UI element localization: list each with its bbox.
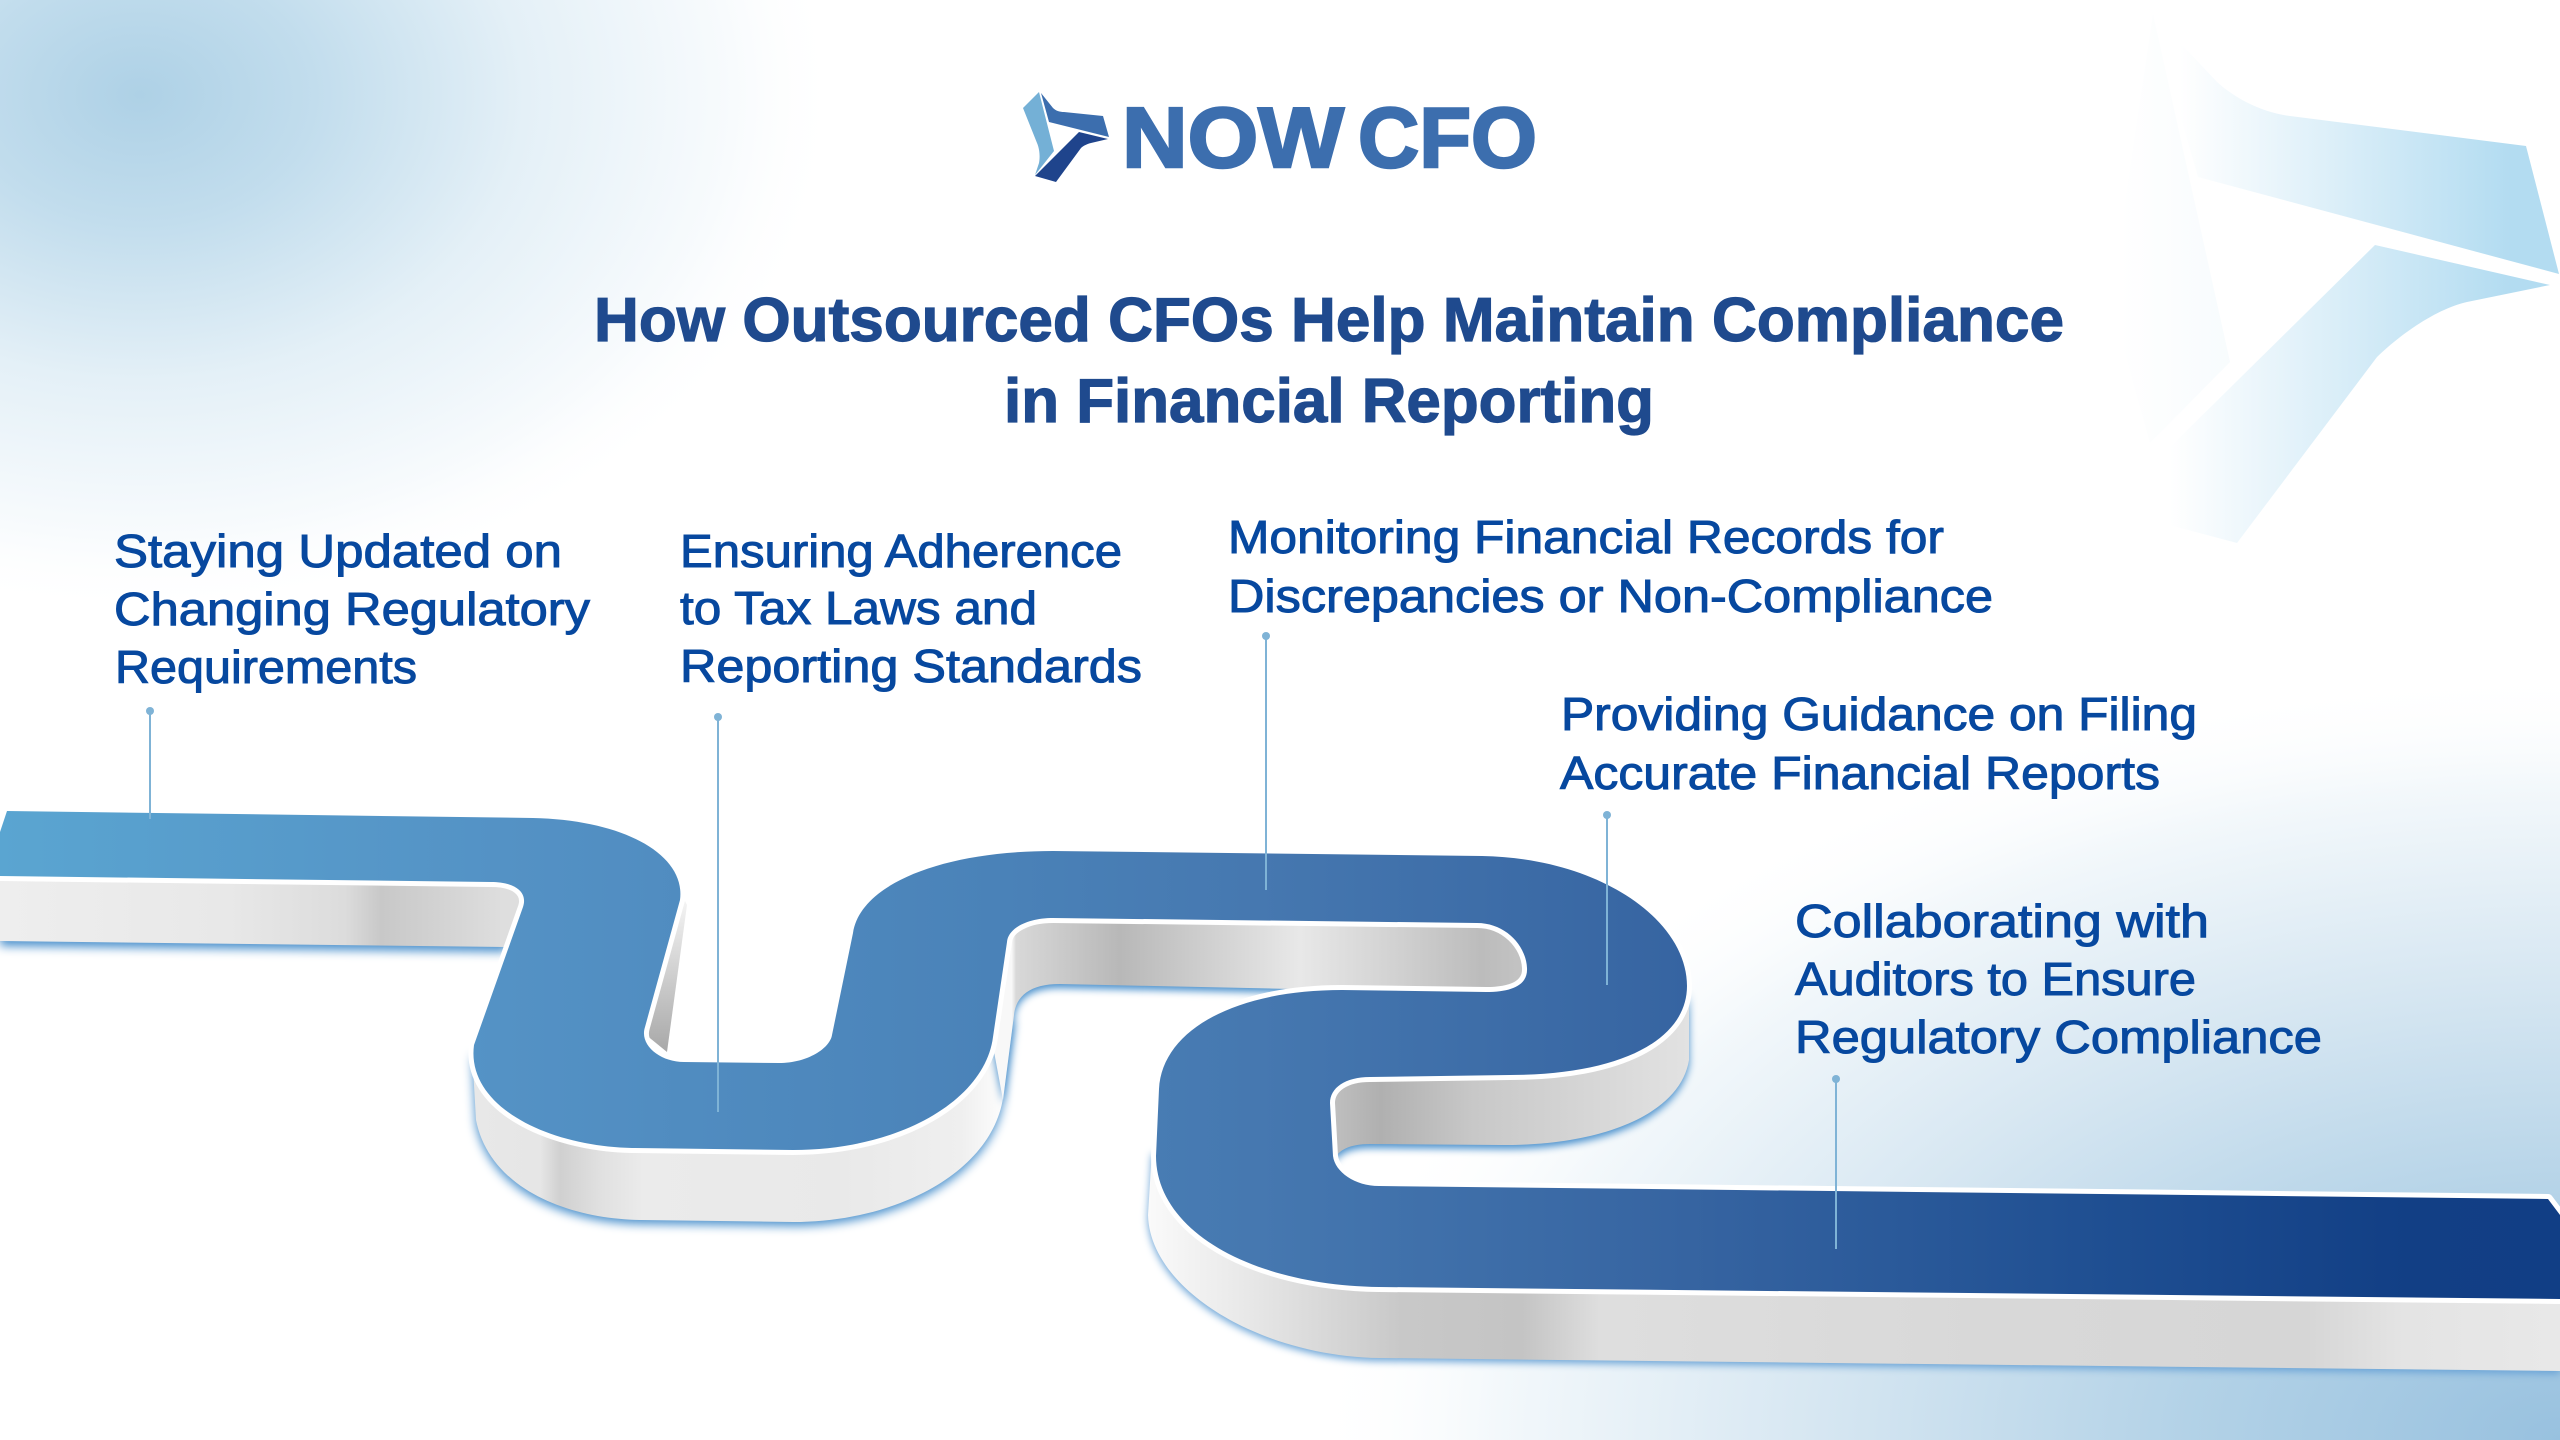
road side wall: lower strip left [0,870,528,947]
road side wall: right bend [1325,986,1689,1160]
title: How Outsourced CFOs Help Maintain Compliance [594,286,2064,355]
pin 3 [1262,632,1270,890]
watermark arrow icon [2110,11,2559,543]
label 5: Collaborating with Auditors: Collaborating with [1795,895,2209,947]
label 4: Providing Guidance [1560,688,2197,799]
icon: logo mark [1023,92,1109,182]
road top surface [0,811,2560,1299]
label 4: Providing Guidance: Providing Guidance on Filing [1561,688,2197,740]
pin 1 [146,707,154,819]
label 2: Ensuring Adherence: Reporting Standards [680,640,1142,692]
logo wordmark [1122,91,1537,186]
label 5: Collaborating with Auditors: Auditors to Ensure [1795,953,2196,1005]
road side wall: slot [990,914,1535,1100]
logo wordmark: CFO [1358,91,1537,186]
label 4: Providing Guidance: Accurate Financial Reports [1560,747,2160,799]
label 1: Staying Updated [114,525,590,693]
pin 5 [1832,1075,1840,1249]
road side wall: narrow notch [640,893,687,1052]
label 2: Ensuring Adherence: to Tax Laws and [680,582,1037,634]
label 3: Monitoring Financial Records [1228,511,1993,622]
logo wordmark: NOW [1122,91,1345,186]
label 1: Staying Updated: Requirements [115,641,417,693]
title [594,286,2064,436]
logo: NOW CFO [1023,91,1537,186]
road side wall: first bend [472,1015,1014,1222]
label 3: Monitoring Financial Records: Discrepancies or Non-Compliance [1228,570,1993,622]
pin 4 [1603,811,1611,985]
title: in Financial Reporting [1004,367,1654,436]
road side wall: long bottom [1148,1150,2560,1371]
label 3: Monitoring Financial Records: Monitoring Financial Records for [1228,511,1944,563]
label 1: Staying Updated: Staying Updated on [114,525,562,577]
label 5: Collaborating with Auditors: Regulatory Compliance [1795,1011,2322,1063]
label 1: Staying Updated: Changing Regulatory [114,583,590,635]
label 5: Collaborating with Auditors [1795,895,2322,1063]
winding road 3D path [0,811,2560,1371]
label 2: Ensuring Adherence [680,525,1142,692]
pin 2 [714,713,722,1112]
label 2: Ensuring Adherence: Ensuring Adherence [680,525,1122,577]
